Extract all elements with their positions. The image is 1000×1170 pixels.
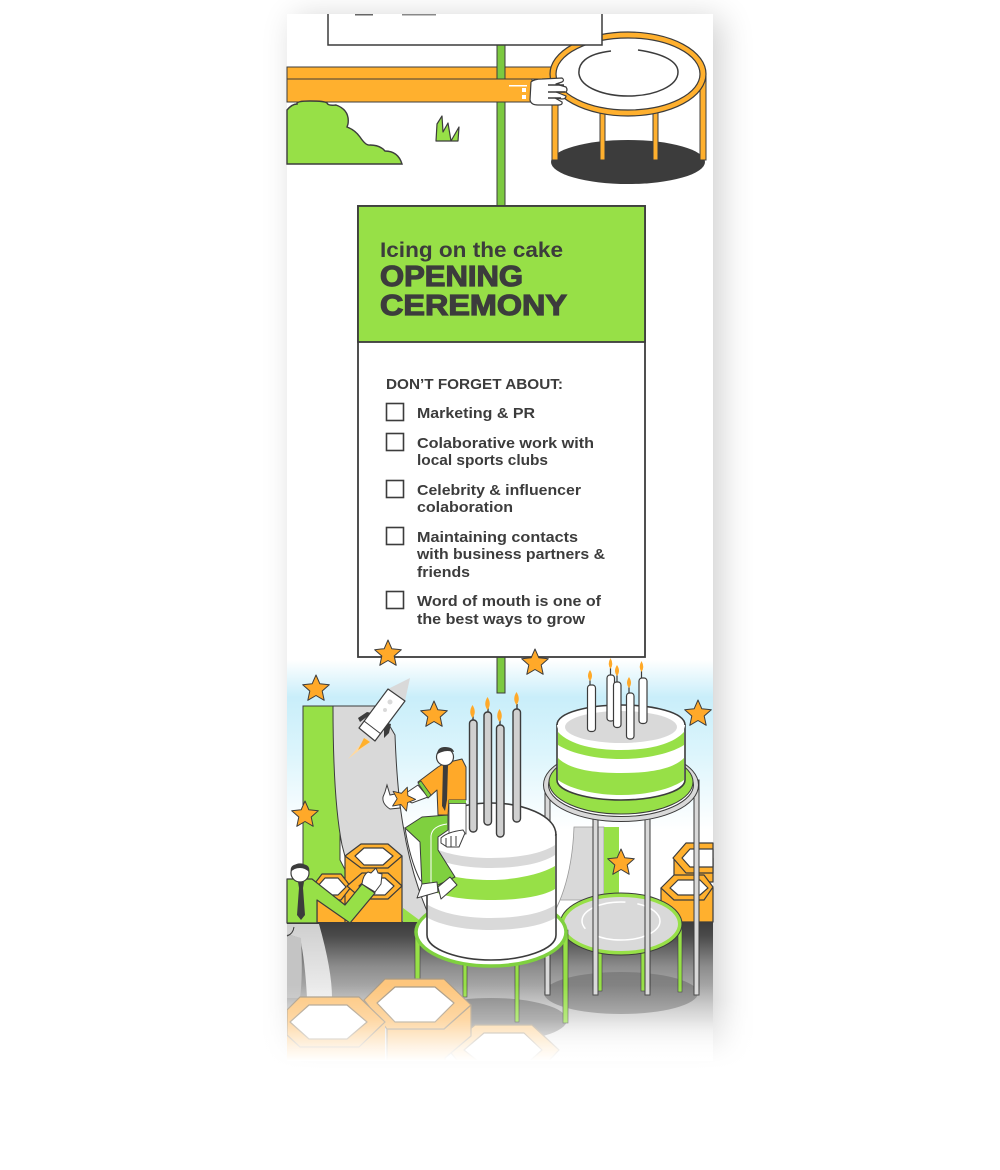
small candles: [588, 658, 647, 739]
trampoline: [550, 32, 706, 184]
item 2: local sports clubs: [417, 452, 548, 469]
item 4: with business partners &: [416, 546, 605, 563]
grey band lower: [428, 905, 555, 930]
item 4: [386, 528, 605, 581]
star over card left: [375, 640, 401, 665]
hex A: [287, 996, 386, 1056]
seated man: back thigh: [405, 828, 428, 887]
ground: [287, 922, 713, 1060]
item 4: Maintaining contacts: [417, 529, 578, 546]
cake bottom band: [558, 758, 684, 795]
white hand on beam: [530, 78, 567, 105]
orange hex boxes right: [661, 843, 713, 922]
checklist heading: DON’T FORGET ABOUT:: [386, 376, 563, 393]
cake upper band: [558, 732, 684, 759]
seated man: green belt: [449, 800, 466, 804]
right background wall: [553, 827, 619, 915]
bush: [287, 101, 402, 164]
card body: [358, 206, 645, 657]
stand plate: [416, 898, 566, 966]
title: [380, 261, 567, 322]
man: tie: [297, 882, 305, 920]
seated man: green cuff: [418, 781, 431, 798]
seated man: green trousers: [405, 815, 455, 887]
star 3: [303, 675, 329, 700]
item 3: colaboration: [417, 499, 513, 516]
star 4: [421, 701, 447, 726]
grass tuft: [436, 116, 459, 141]
cake top: [557, 705, 685, 745]
green header: [358, 206, 645, 342]
title: OPENING: [380, 261, 523, 293]
item 2: [386, 434, 594, 469]
seated man: white arm: [400, 785, 428, 803]
subtitle: Icing on the cake: [380, 239, 563, 262]
star 7: [608, 849, 634, 874]
seated man: tie: [442, 765, 448, 811]
stars: [292, 675, 711, 874]
lower plate legs right: [598, 925, 682, 992]
rocket fins: [358, 712, 391, 738]
seated man: head: [436, 748, 454, 766]
green pole: upper: [497, 45, 505, 206]
foreground hexes: [287, 978, 560, 1056]
orange hex boxes left: [312, 844, 402, 923]
lower plate shadow right: [544, 972, 698, 1014]
stars overlapping card: [375, 640, 548, 674]
item 1: Marketing & PR: [417, 405, 535, 422]
seated man: held hand: [383, 785, 400, 809]
hex B: [364, 979, 471, 1029]
stand green legs: [415, 930, 568, 1023]
rocket: [348, 678, 410, 759]
seated man: orange shirt: [418, 759, 466, 815]
bottom fade: [287, 985, 713, 1061]
man: green body and arm: [287, 879, 375, 923]
big cake stand: [415, 898, 568, 1023]
star 5: [685, 700, 711, 725]
stand ring: [546, 751, 696, 819]
item 3: [386, 480, 581, 516]
seated man: [383, 747, 466, 899]
hex box B side: [386, 1006, 472, 1056]
item 3: Celebrity & influencer: [417, 482, 581, 499]
sky gradient: [287, 660, 713, 830]
seated man: hand on cake: [441, 830, 465, 847]
orange beam: back: [287, 67, 557, 79]
checklist card: [358, 206, 645, 657]
star 6: [292, 801, 318, 826]
star over card right: [522, 649, 548, 674]
stand green plate: [549, 750, 693, 814]
upper panel bottom: [328, 14, 602, 45]
grey band upper: [428, 845, 555, 868]
orange beam: front: [287, 79, 532, 102]
item 2: Colaborative work with: [417, 435, 594, 452]
left man: [287, 864, 382, 923]
seated man: white torso: [449, 804, 466, 834]
green pole: lower: [497, 657, 505, 693]
lower plate right: [560, 893, 682, 955]
rocket flame: [348, 738, 370, 759]
big candles: [470, 692, 520, 837]
right cake: [557, 705, 685, 800]
item 1: [386, 404, 535, 422]
rocket body: [359, 689, 405, 741]
item 5: the best ways to grow: [417, 611, 585, 628]
wall: green: [303, 706, 372, 922]
seated man: shoes: [417, 877, 457, 899]
man: head: [291, 864, 309, 882]
rocket cone: [388, 678, 410, 701]
wall: small green wedge: [403, 908, 422, 922]
title: CEREMONY: [380, 290, 567, 322]
green band: [428, 866, 555, 900]
big cake: [427, 803, 556, 960]
card background: [287, 14, 713, 1054]
right cake stand: [545, 750, 699, 995]
stand legs: [545, 780, 699, 995]
star 8: [388, 783, 419, 813]
man: hand: [362, 868, 382, 892]
wall: grey curved: [333, 706, 432, 922]
hex C: [451, 1024, 560, 1056]
big cake shadow: [415, 998, 567, 1042]
item 4: friends: [417, 564, 470, 581]
left man legs: [287, 924, 332, 998]
item 5: [386, 592, 602, 628]
cake top: [428, 804, 555, 850]
item 5: Word of mouth is one of: [417, 593, 602, 610]
man: hair: [291, 864, 309, 872]
